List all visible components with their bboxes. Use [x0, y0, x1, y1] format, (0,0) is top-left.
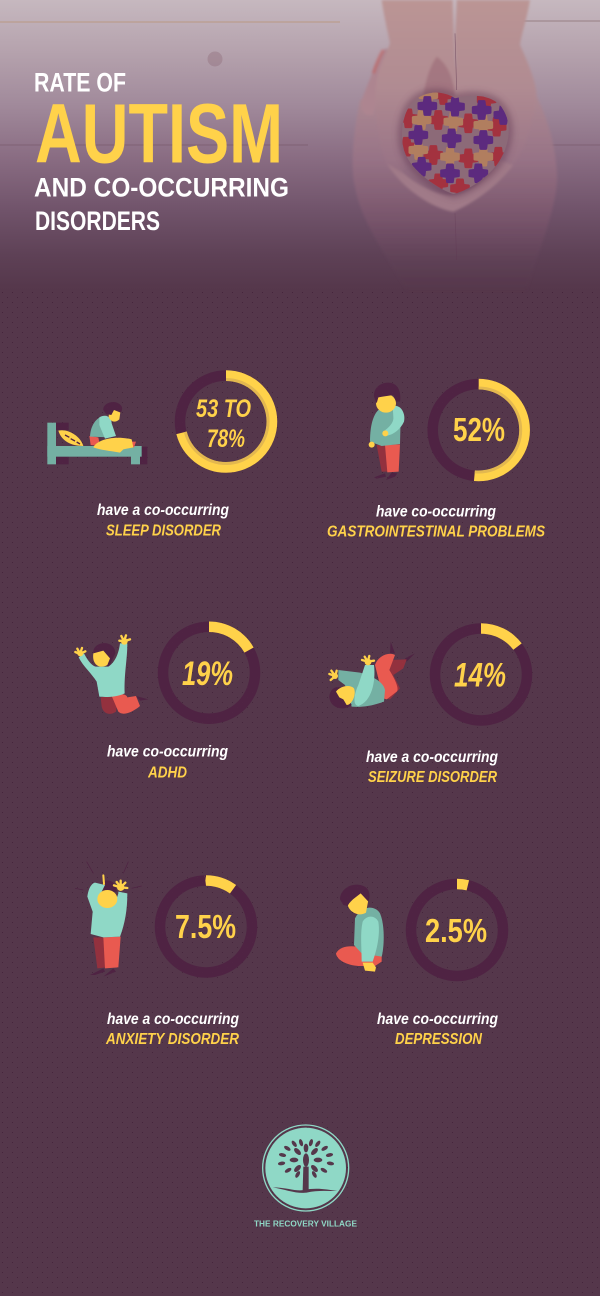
icon: child sitting with head down	[336, 885, 384, 972]
panel: sleep disorder	[47, 376, 272, 540]
panel: ADHD	[75, 627, 255, 782]
puzzle heart	[402, 92, 508, 194]
caption: SEIZURE DISORDER	[368, 769, 497, 786]
title	[34, 68, 289, 236]
caption: DEPRESSION	[395, 1031, 482, 1048]
caption: ANXIETY DISORDER	[105, 1031, 239, 1048]
title: AND CO-OCCURRING	[34, 172, 289, 202]
header photo: wood table with hands holding puzzle heart	[0, 0, 600, 290]
icon: child holding stomach	[369, 383, 404, 480]
caption	[97, 502, 229, 540]
caption: have a co-occurring	[366, 749, 498, 766]
wordmark: THE RECOVERY VILLAGE	[254, 1218, 357, 1228]
caption: have co-occurring	[376, 504, 496, 520]
icon: child sitting on bed	[47, 402, 147, 464]
caption: GASTROINTESTINAL PROBLEMS	[327, 524, 545, 540]
heart shadow	[402, 93, 509, 194]
panel: anxiety disorder	[75, 862, 252, 1048]
donut chart: 53 to 78%	[180, 376, 272, 468]
panel: seizure disorder	[329, 628, 527, 786]
icon: child jumping	[75, 635, 148, 714]
icon: tree in circle	[263, 1125, 349, 1211]
title: DISORDERS	[35, 206, 160, 236]
donut chart: 7.5%: 7.5%	[175, 908, 236, 945]
hands holding heart	[352, 0, 556, 235]
caption	[377, 1011, 498, 1048]
wood table	[0, 0, 600, 290]
donut chart: 53 to 78%: 53 TO	[196, 395, 251, 423]
donut chart: 52%	[433, 384, 525, 476]
donut chart: 2.5%	[411, 884, 503, 976]
donut chart: 2.5%: 2.5%	[425, 912, 487, 949]
donut chart: 14%	[435, 628, 527, 720]
donut chart: 52%: 52%	[453, 411, 505, 448]
caption	[105, 1011, 239, 1048]
donut chart: 14%: 14%	[454, 656, 506, 694]
panel: depression	[336, 884, 503, 1048]
caption	[107, 744, 228, 782]
title: AUTISM	[35, 86, 283, 180]
caption: have co-occurring	[377, 1011, 498, 1028]
caption: have co-occurring	[107, 744, 228, 760]
donut chart: 19%	[163, 627, 255, 719]
caption	[327, 504, 545, 540]
caption	[366, 749, 498, 786]
donut chart: 19%: 19%	[182, 655, 233, 693]
icon: child falling	[329, 642, 415, 708]
caption: ADHD	[147, 764, 187, 782]
logo: The Recovery Village	[254, 1125, 357, 1228]
donut chart: 53 to 78%: 78%	[207, 425, 245, 453]
background texture	[0, 270, 600, 1296]
caption: have a co-occurring	[97, 502, 229, 519]
caption: SLEEP DISORDER	[106, 522, 221, 540]
caption: have a co-occurring	[107, 1011, 239, 1028]
icon: child with hands on head	[75, 862, 142, 977]
panel: gastrointestinal problems	[327, 383, 545, 540]
donut chart: 7.5%	[160, 880, 252, 972]
title: RATE OF	[34, 68, 126, 98]
